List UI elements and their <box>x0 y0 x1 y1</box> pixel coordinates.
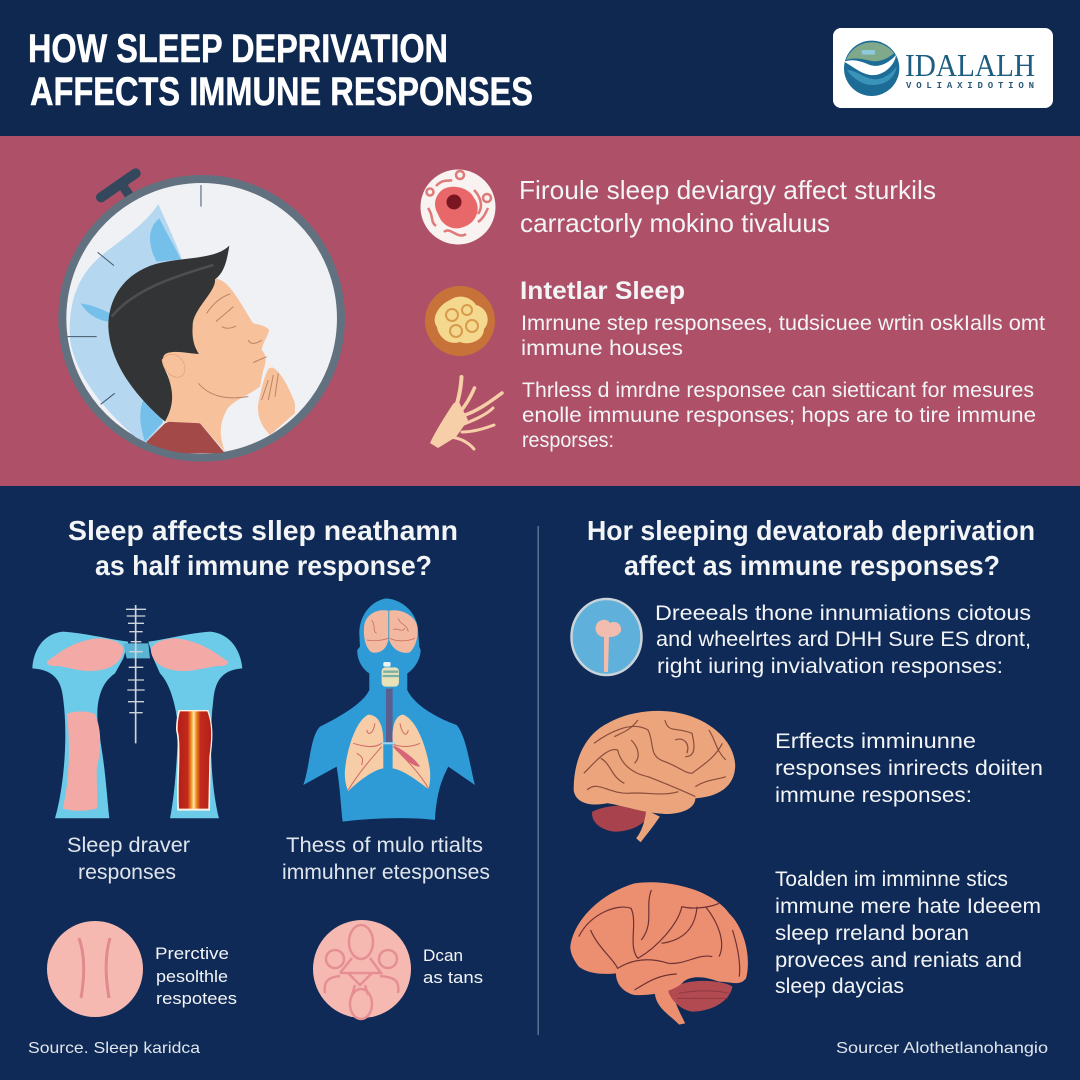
label: protective responses: respotees <box>156 989 237 1008</box>
icon: brain two <box>570 882 748 1025</box>
text block: right two <box>775 730 1043 807</box>
title <box>28 27 533 114</box>
label: torso illustration <box>282 834 490 884</box>
text block: third finding: enolle immuune responses; hops are to tire immune <box>522 404 1036 427</box>
panel: right column <box>570 515 1048 1057</box>
source: right: Sourcer Alothetlanohangio <box>836 1040 1048 1057</box>
label: dcan ostans: as tans <box>423 968 483 987</box>
text block: right one <box>655 602 1031 678</box>
label: protective responses: Prerctive <box>155 944 229 963</box>
text block: third finding: Thrless d imrdne responsee can sietticant for mesures <box>522 379 1034 402</box>
icon: pink disc with figures <box>313 920 411 1019</box>
label: torso illustration: Thess of mulo rtialts <box>286 834 483 857</box>
text block: third finding: resporses: <box>522 429 614 452</box>
heading: right: Hor sleeping devatorab deprivation <box>587 515 1035 546</box>
heading: left: Sleep affects sllep neathamn <box>68 515 458 546</box>
icon: blue circle with brain stem <box>572 599 642 675</box>
header band <box>0 0 1080 136</box>
title: AFFECTS IMMUNE RESPONSES <box>30 70 533 114</box>
text block: right three: sleep rreland boran <box>775 922 969 945</box>
text block: right one: Dreeeals thone innumiations ciotous <box>655 602 1031 625</box>
text block: right three: proveces and reniats and <box>775 949 1022 972</box>
text block: right one: right iuring invialvation responses: <box>657 655 1003 678</box>
text block: second finding <box>520 277 1045 360</box>
icon: ear <box>162 354 185 377</box>
text block: third finding <box>522 379 1036 452</box>
text block: right three: sleep daycias <box>775 975 904 998</box>
text block: right one: and wheelrtes ard DHH Sure ES dront, <box>656 628 1031 651</box>
label: left illustration: Sleep draver <box>67 834 190 857</box>
icon: pink disc with two lines <box>47 921 143 1017</box>
label: torso illustration: immuhner etesponses <box>282 861 490 884</box>
source: left: Source. Sleep karidca <box>28 1040 200 1057</box>
heading: right <box>587 515 1035 581</box>
text block: first finding: carractorly mokino tivaluus <box>520 208 830 238</box>
label: dcan ostans: Dcan <box>423 946 463 965</box>
title: HOW SLEEP DEPRIVATION <box>28 27 448 71</box>
heading: right: affect as immune responses? <box>624 550 1000 581</box>
text block: right two: responses inrirects doiiten <box>775 757 1043 780</box>
text block: second finding: Intetlar Sleep <box>520 277 685 305</box>
illustration: sleeping man in clock <box>62 173 341 458</box>
text block: right three: immune mere hate Ideeem <box>775 895 1041 918</box>
label: protective responses: pesolthle <box>156 967 228 986</box>
text block: second finding: immune houses <box>521 337 683 360</box>
logo card <box>833 28 1053 108</box>
illustration: torso with brain and lungs <box>303 598 475 822</box>
panel: rose band <box>0 136 1080 486</box>
logo tagline: VOLIAXIDOTION <box>906 81 1034 91</box>
icon: logo globe <box>844 41 899 96</box>
text block: first finding <box>519 175 936 238</box>
icon: immune cell <box>420 170 496 244</box>
text block: right two: immune responses: <box>775 784 972 807</box>
label: dcan ostans <box>423 946 483 987</box>
label: protective responses <box>155 944 237 1008</box>
illustration: spine and limbs <box>32 605 242 818</box>
text block: right three <box>775 868 1041 998</box>
icon: orange cell cluster <box>425 286 495 356</box>
icon: brain one <box>574 711 735 842</box>
panel: left column <box>28 515 490 1057</box>
text block: right two: Erffects imminunne <box>775 730 976 753</box>
logo wordmark: IDALALH <box>905 47 1035 83</box>
text block: first finding: Firoule sleep deviargy affect sturkils <box>519 175 936 205</box>
text block: second finding: Imrnune step responsees, tudsicuee wrtin oskIalls omt <box>521 312 1045 335</box>
icon: nerve hand <box>430 377 502 449</box>
label: left illustration: responses <box>78 861 176 884</box>
heading: left <box>68 515 458 581</box>
text block: right three: Toalden im imminnе stics <box>775 868 1008 891</box>
label: left illustration <box>67 834 190 884</box>
heading: left: as half immune response? <box>95 550 432 581</box>
